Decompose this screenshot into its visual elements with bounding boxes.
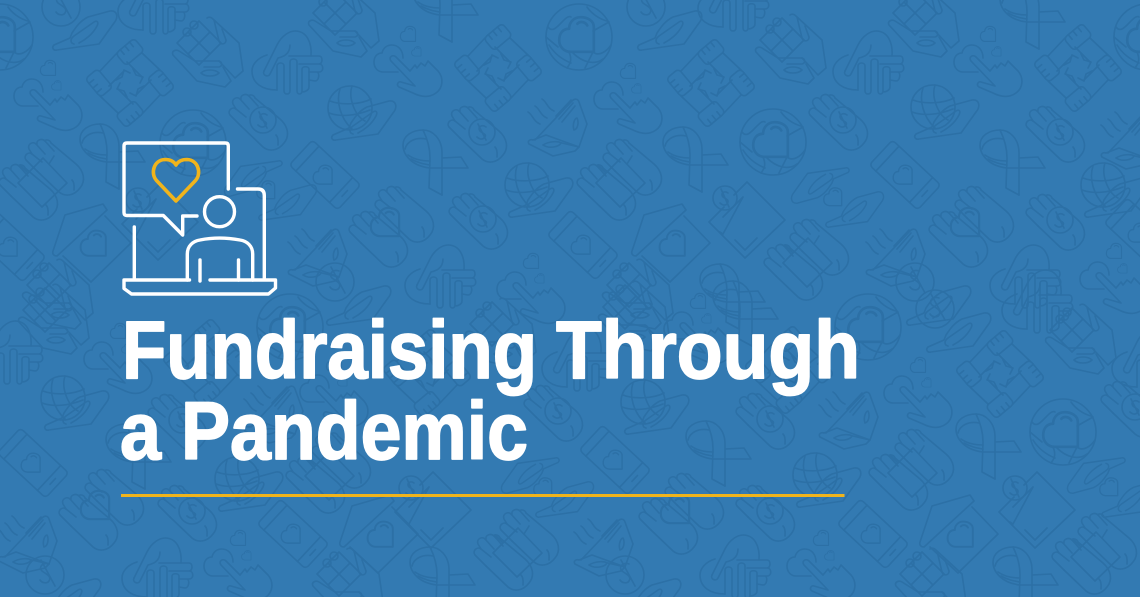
laptop screen <box>134 189 264 279</box>
title: Pandemic <box>181 386 528 477</box>
speech bubble <box>124 143 228 235</box>
icon: yellow heart <box>153 160 199 201</box>
laptop base <box>124 280 276 294</box>
title <box>120 305 860 477</box>
icon: person on laptop with heart speech bubble <box>124 143 276 294</box>
title: Through <box>556 305 860 396</box>
title: a <box>120 386 162 477</box>
person <box>187 197 253 281</box>
title: Fundraising <box>122 305 537 396</box>
yellow underline <box>121 494 844 497</box>
